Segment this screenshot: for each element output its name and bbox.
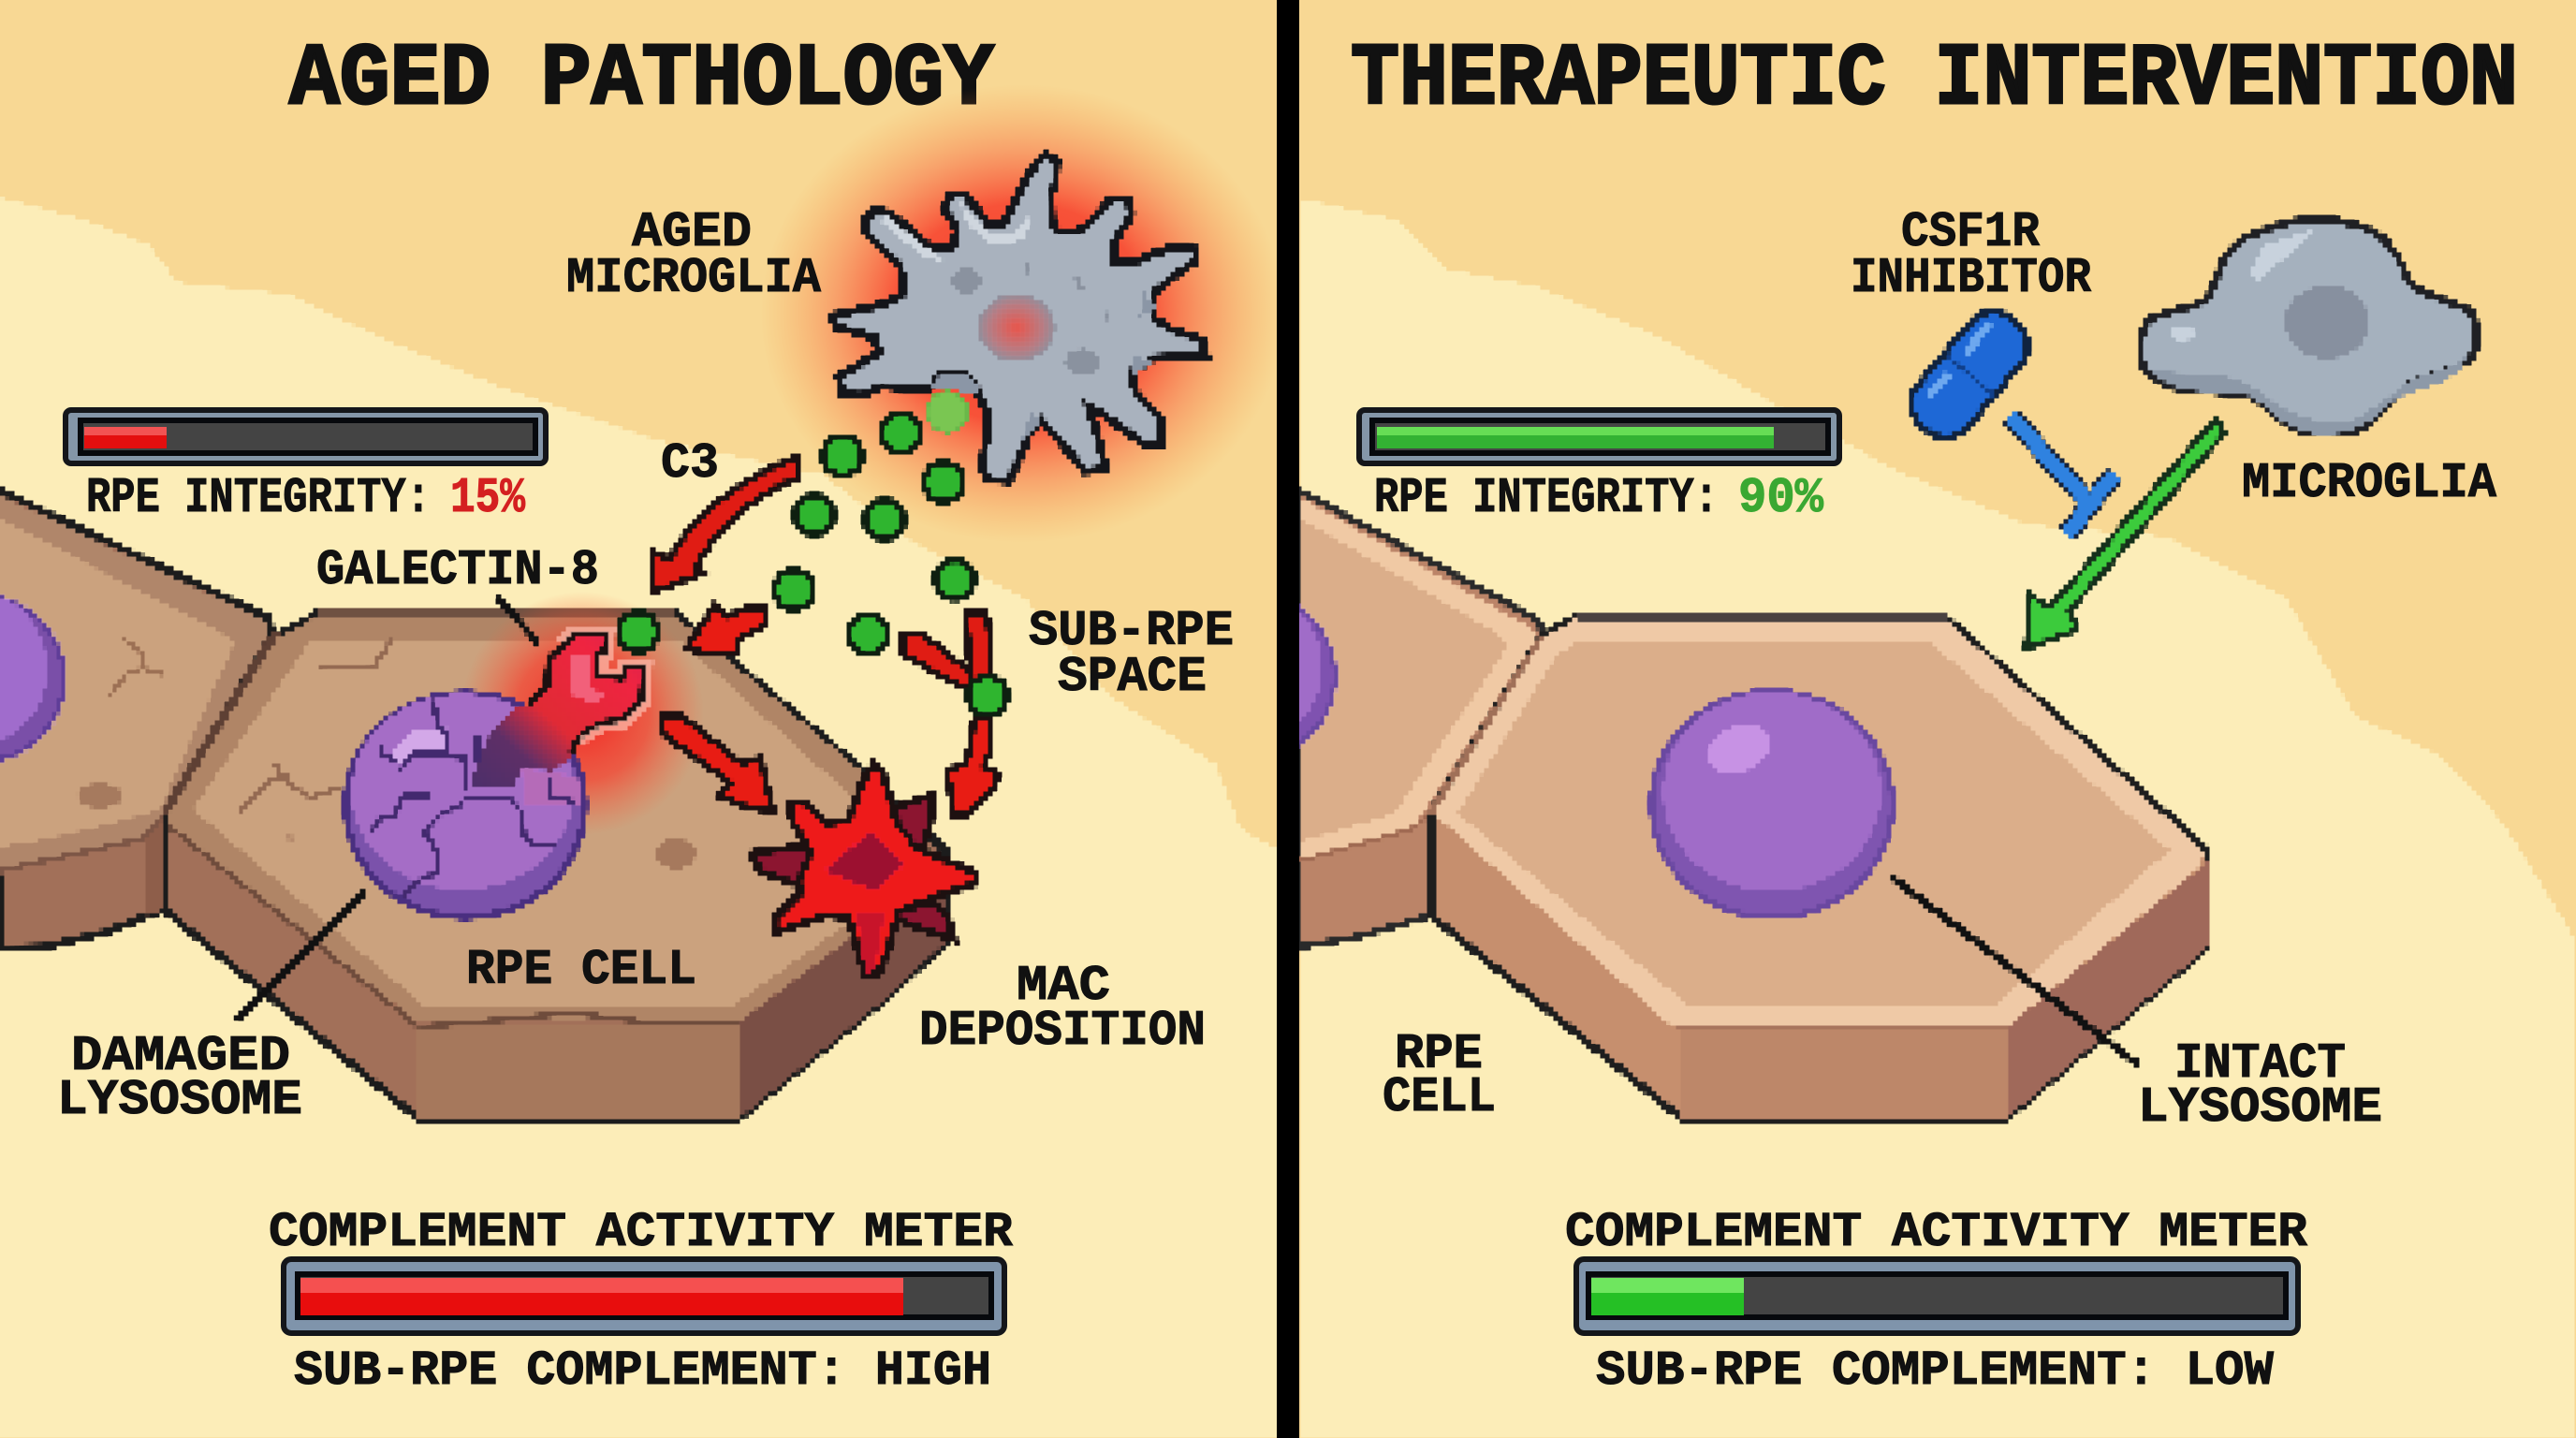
- label: microglia: MICROGLIA: [2242, 455, 2496, 511]
- meter: complement high: [284, 1259, 1004, 1333]
- text: sub-RPE complement low: SUB-RPE COMPLEMENT: LOW: [1596, 1343, 2275, 1399]
- arrow: C3 to galectin-8: [652, 458, 797, 592]
- divider: [1277, 0, 1299, 1438]
- labels: intact lysosome: [2138, 1035, 2382, 1136]
- label: RPE cell: RPE CELL: [466, 942, 696, 998]
- icon: inhibition line: [2011, 417, 2114, 534]
- label line: galectin-8: [497, 598, 538, 642]
- text: RPE integrity 15%: RPE INTEGRITY:: [86, 470, 431, 526]
- panel: aged pathology: [0, 0, 1284, 1438]
- labels: RPE cell: CELL: [1383, 1069, 1496, 1125]
- cell: neighbouring RPE cell: [1168, 492, 1543, 946]
- text: sub-RPE complement high: SUB-RPE COMPLEMENT: HIGH: [294, 1343, 991, 1399]
- labels: sub-RPE space: SUB-RPE: [1029, 603, 1234, 659]
- labels: intact lysosome: LYSOSOME: [2138, 1079, 2382, 1136]
- labels: CSF1R inhibitor: [1851, 204, 2091, 306]
- icon: MAC deposition: [752, 765, 975, 974]
- label: galectin-8: GALECTIN-8: [316, 542, 599, 598]
- panel: therapeutic intervention: [1168, 0, 2576, 1438]
- labels: RPE cell: [1383, 1026, 1496, 1125]
- molecules: C3 complement particles: [620, 392, 1006, 714]
- labels: aged microglia: [566, 204, 821, 306]
- title: aged pathology: AGED PATHOLOGY: [289, 31, 995, 130]
- text: RPE integrity 90%: RPE INTEGRITY:: [1374, 470, 1719, 526]
- icon: galectin-8: [471, 635, 643, 788]
- labels: intact lysosome: INTACT: [2174, 1035, 2346, 1092]
- labels: sub-RPE space: [1029, 603, 1234, 705]
- cell: healthy RPE cell: [1431, 618, 2207, 1118]
- arrow: microglia to RPE cell: [2027, 420, 2224, 648]
- label line: intact lysosome: [1892, 877, 2138, 1064]
- labels: damaged lysosome: DAMAGED: [71, 1028, 290, 1084]
- arrow: galectin-8 to MAC: [663, 716, 772, 810]
- meter: complement low: [1576, 1259, 2298, 1333]
- labels: aged microglia: MICROGLIA: [566, 250, 821, 306]
- icon: microglia: [2141, 219, 2477, 433]
- labels: MAC deposition: [919, 958, 1206, 1059]
- arrow: particle to vertical path: [903, 635, 972, 686]
- cell: damaged RPE cell: [166, 613, 945, 1118]
- meter: RPE integrity 90%: [1359, 410, 1839, 463]
- icon: aged microglia: [833, 156, 1206, 480]
- heading: complement activity meter: COMPLEMENT ACTIVITY METER: [269, 1205, 1014, 1260]
- text: RPE integrity 15%: 15%: [450, 470, 525, 526]
- arrow: sub-RPE down to MAC: [947, 718, 997, 814]
- labels: CSF1R inhibitor: CSF1R: [1901, 204, 2040, 260]
- labels: damaged lysosome: LYSOSOME: [57, 1072, 302, 1128]
- labels: sub-RPE space: SPACE: [1058, 649, 1207, 705]
- nucleus: intact lysosome: [1652, 692, 1892, 917]
- labels: CSF1R inhibitor: INHIBITOR: [1851, 250, 2091, 306]
- labels: MAC deposition: DEPOSITION: [919, 1003, 1206, 1059]
- glow: galectin-8 inflammation: [472, 595, 695, 826]
- icon: CSF1R inhibitor pill: [1900, 301, 2039, 448]
- arrow: particle to galectin-8: [688, 607, 766, 653]
- label: C3: C3: [661, 435, 719, 492]
- labels: MAC deposition: MAC: [1017, 958, 1110, 1014]
- meter: RPE integrity 15%: [66, 410, 546, 463]
- glow: aged microglia: [760, 84, 1284, 543]
- nucleus: damaged lysosome: [346, 694, 584, 917]
- cell: neighbouring RPE cell: [0, 492, 271, 947]
- text: RPE integrity 90%: 90%: [1738, 470, 1823, 526]
- heading: complement activity meter: COMPLEMENT ACTIVITY METER: [1565, 1205, 2308, 1260]
- labels: aged microglia: AGED: [632, 204, 752, 260]
- labels: damaged lysosome: [57, 1028, 302, 1128]
- label line: damaged lysosome: [238, 892, 365, 1020]
- arrow: sub-RPE upper segment: [967, 613, 990, 681]
- labels: RPE cell: RPE: [1395, 1026, 1483, 1082]
